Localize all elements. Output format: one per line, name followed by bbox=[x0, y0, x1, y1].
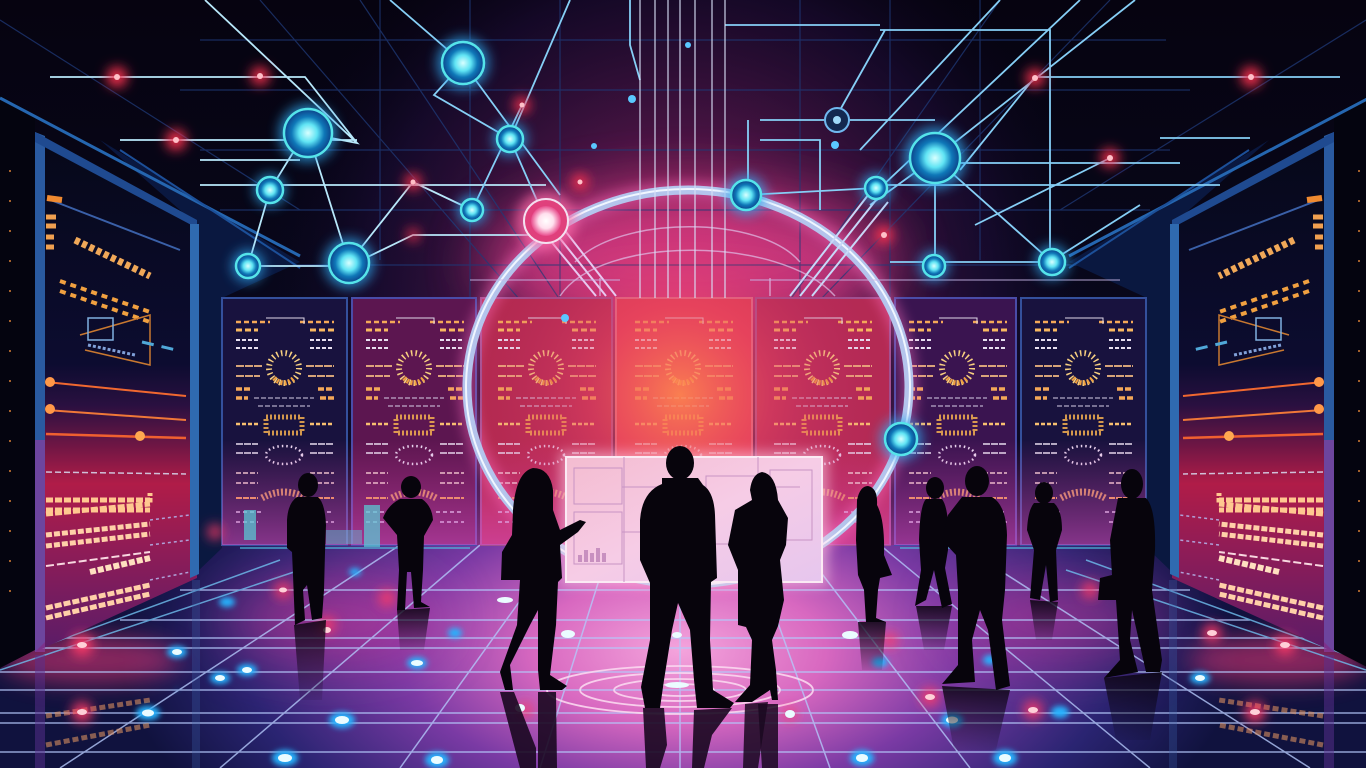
ceiling grid bbox=[0, 0, 1366, 300]
people silhouettes bbox=[287, 446, 1162, 708]
floor circuit lines bbox=[0, 545, 1366, 768]
floor pink patch under left wall bbox=[0, 636, 180, 684]
person: woman right bbox=[728, 472, 788, 702]
floor target rings bbox=[547, 666, 813, 714]
node: dark ring node bbox=[825, 108, 849, 132]
upper pink haze bbox=[180, 0, 1180, 560]
floor lights bbox=[71, 525, 1295, 768]
node: lower left large bbox=[329, 243, 369, 283]
node: far lower left bbox=[236, 254, 260, 278]
person: centre man bbox=[640, 446, 734, 708]
person: man far back right bbox=[1027, 482, 1062, 602]
rack 6 bbox=[895, 298, 1016, 545]
rack 7 bbox=[1021, 298, 1146, 545]
node: left small bbox=[257, 177, 283, 203]
network nodes bbox=[232, 37, 1069, 460]
floor bbox=[0, 545, 1366, 768]
rack 1 bbox=[222, 298, 347, 545]
floor pink patch right bbox=[950, 580, 1170, 660]
person: second left man bbox=[383, 476, 433, 610]
node: ring top right bbox=[731, 180, 761, 210]
person: man far right bbox=[1098, 469, 1162, 678]
floor pink patch left bbox=[220, 580, 440, 660]
rack 5 bbox=[756, 298, 890, 545]
circuit network lines bbox=[50, 0, 1340, 298]
node: upper right large bbox=[910, 133, 960, 183]
node: top centre left bbox=[442, 42, 484, 84]
server racks row bbox=[222, 298, 1146, 547]
right side wall bbox=[1069, 95, 1366, 768]
left side wall bbox=[0, 95, 300, 768]
magenta glow inside ring bbox=[483, 192, 893, 332]
rack 2 bbox=[352, 298, 476, 545]
holographic board bbox=[560, 452, 828, 586]
red and blue signal lights bbox=[107, 42, 1261, 322]
node: pink ring node bbox=[516, 191, 576, 251]
person: man back right bbox=[915, 477, 952, 608]
node: right small bbox=[865, 177, 887, 199]
floor pink patch under right wall bbox=[1188, 636, 1366, 684]
node: centre left lower bbox=[461, 199, 483, 221]
person: man right bbox=[942, 466, 1010, 690]
person: far left man bbox=[287, 473, 326, 625]
node: upper left large bbox=[284, 109, 332, 157]
node: centre left upper bbox=[497, 126, 523, 152]
node: lower right bbox=[923, 255, 945, 277]
rack 4 bbox=[616, 298, 752, 545]
glowing ring bbox=[466, 189, 910, 585]
person: woman left bbox=[500, 468, 586, 690]
rack bottom glow bbox=[222, 440, 1146, 545]
central warm glow bbox=[480, 195, 880, 595]
node: ring right bbox=[885, 423, 917, 455]
node halos bbox=[232, 37, 1069, 460]
people reflections bbox=[294, 600, 1162, 768]
node: far right bbox=[1039, 249, 1065, 275]
teal server icon left bbox=[244, 505, 380, 547]
person: woman back right bbox=[856, 486, 892, 622]
rack 3 bbox=[481, 298, 612, 545]
